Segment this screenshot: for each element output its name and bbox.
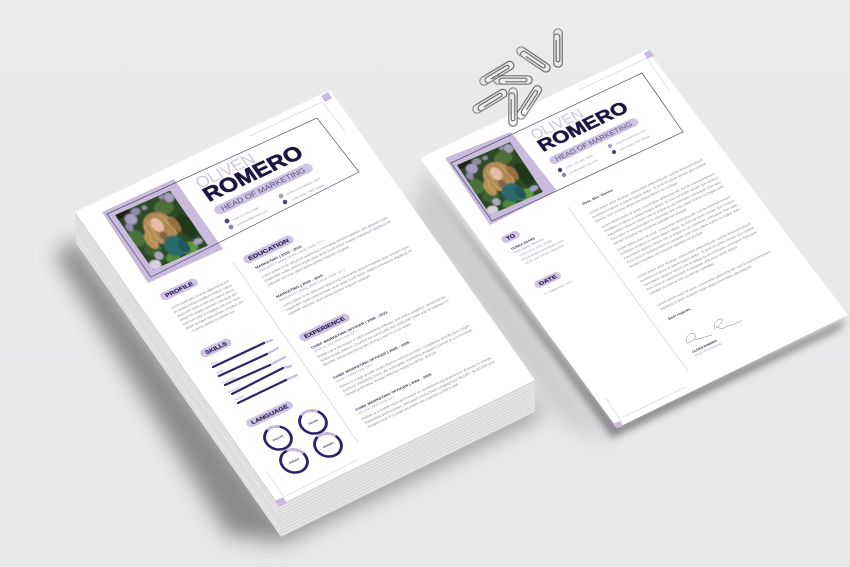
experience entry 1: Bestle Ltd is the leader in SEO marketing software and online analytics, delivered the xyxy=(317,295,447,359)
skill bars xyxy=(213,340,297,403)
experience entry 2: Haney is a high growth music-finance service provider, companies directly don't forget xyxy=(339,324,470,389)
corner accent bottom xyxy=(606,387,686,428)
profile text: aliqua enim minim veniam quis nostrud ullamco xyxy=(176,288,236,318)
education entry 2: UNIVERSITY NAME HERE | NEW YORK CITY xyxy=(278,268,346,302)
experience entry 1: $50,000, shared everything seen during 3 days in social media xyxy=(322,322,412,367)
letter paragraph 4: Lorem ipsum dolor sit amet, consectetur adipiscing elit, sed do eiusmod tempor xyxy=(636,221,753,279)
letter paragraph 3: pariatur excepteur sint occaecat cupidatat non proident xyxy=(629,231,703,268)
experience entry 1: CHIEF MARKETING OFFICER | 2006 - 2021 xyxy=(310,310,389,350)
experience entry 3: managed a team of 12 people and projects with a approach to 2002 to 2005 xyxy=(366,383,459,429)
experience entry 1 xyxy=(310,286,453,367)
corner accent top xyxy=(250,92,345,136)
column divider xyxy=(233,262,358,442)
language rings xyxy=(259,406,347,477)
profile text: occaecat cupidatat non proident sunt xyxy=(191,309,235,333)
letter paragraph 3: irure dolor in reprehenderit in voluptate velit esse cillum dolore eu fugiat nulla xyxy=(625,207,741,264)
education entry 1 xyxy=(254,207,395,287)
letter paragraph 1: process, such as cloud offices exercitation laboris nisi ut aliquip xyxy=(594,181,678,223)
contact details: youremail@email.com xyxy=(235,209,269,227)
education entry 2: vulputate velit esse cillum dolore pariatur magnam voluptate xyxy=(287,274,371,316)
experience entry 2: HANEY | NEW YORK CITY xyxy=(335,363,373,383)
contact details: www.yourwebsite.com xyxy=(285,176,322,196)
experience entry 1: fastest brand platform. Doubled the community size $500,000 users and 78 followers in xyxy=(320,299,450,363)
letter paragraph 2: incididunt ut labore et dolore magna aliqua. Ut enim ad minim veniam quis nostrud xyxy=(603,176,719,233)
language rings: FRENCH xyxy=(288,457,300,465)
signature xyxy=(686,319,742,343)
heading: education xyxy=(241,234,295,265)
corner accent bottom xyxy=(267,460,357,506)
education entry 2: MARKETING | 2010 - 2015 xyxy=(275,274,324,299)
letter page xyxy=(420,50,848,428)
shadow: right sheet xyxy=(410,170,848,445)
letter paragraph 3 xyxy=(616,194,745,268)
education entry 2 xyxy=(275,236,416,316)
heading: skills: SKILLS xyxy=(204,341,229,356)
heading: experience xyxy=(297,312,351,343)
skill labels xyxy=(209,359,246,402)
name: Oliven: OLIVEN xyxy=(527,106,587,143)
heading: education: EDUCATION xyxy=(247,238,291,262)
profile text: Lorem ipsum dolor sit amet adipiscing elit sed xyxy=(170,279,230,310)
letter paragraph 2: pariatur excepteur sint occaecat cupidatat non proident xyxy=(613,208,687,245)
letter paragraph 5: Lorem ipsum dolor sit amet, consectetur adipiscing elit, sed do eiusmod tempor xyxy=(656,249,773,307)
header frame xyxy=(107,118,359,277)
stack side edges xyxy=(75,212,535,537)
contact details: youremail@email.com xyxy=(568,158,599,175)
letter paragraph 2: irure dolor in reprehenderit in voluptate velit esse cillum dolore eu fugiat nulla xyxy=(609,184,725,241)
purple photo backing xyxy=(102,179,223,283)
experience entry 3: Hellow is a mobile start-up focused on revolutionizing experience. Experts in charge xyxy=(361,356,493,421)
photo of woman xyxy=(455,142,545,217)
education entry 1: Lorem ipsum is for assumed adipiscing community behold magnam quis aliquam nunc xyxy=(261,216,389,279)
heading: language: LANGUAGE xyxy=(250,404,290,426)
shadow: left stack xyxy=(56,238,538,542)
letter paragraph 5: incididunt ut labore et dolore magna aliqua consectetur adipiscing elit xyxy=(659,265,752,311)
heading: language xyxy=(244,400,295,429)
name: Romero: ROMERO xyxy=(199,142,308,206)
profile text xyxy=(170,279,247,334)
heading: to: TO xyxy=(505,233,518,242)
experience entry 2: managed goods startup. Managed media buys ranging from $5,000 - $120,000 xyxy=(344,351,437,397)
header frame xyxy=(451,73,683,221)
photo of woman xyxy=(113,190,210,273)
job title pill: HEAD OF MARKETING xyxy=(554,121,634,163)
profile text: laboris nisi aliquip commodo consequat duis xyxy=(179,292,239,322)
experience entry 3 xyxy=(354,347,498,429)
contact details xyxy=(558,128,651,177)
recipient details: +000 123 456 7890 xyxy=(518,239,553,258)
heading: profile: PROFILE xyxy=(164,281,195,299)
language rings: ITALIAN xyxy=(307,418,319,426)
contact details: +000 123 456 7890 xyxy=(231,206,260,222)
education entry 2: imperdiet nulla ullamcorper duis aute irure dolor mattis maximus dapibus et xyxy=(285,249,413,312)
salutation: Dear, Mrs. Donna xyxy=(581,188,614,206)
language rings: ENGLISH xyxy=(272,434,284,442)
profile text: dolore eu fugiat nulla pariatur excepteur sint xyxy=(185,300,244,330)
job title pill xyxy=(212,162,315,216)
skill labels: Word xyxy=(209,359,218,366)
letter paragraph 2: exercitation ullamco laboris nisi ut aliquip ex ea commodo consequat. Duis aute xyxy=(606,180,722,237)
education entry 1: imperdiet nulla ullamcorper duis aute irure dolor mattis maximus dapibus et xyxy=(264,220,392,283)
contact details: 1234 Main York Street xyxy=(618,134,651,152)
skill labels: Illustrator xyxy=(227,385,240,394)
letter paragraph 4: irure dolor in reprehenderit in voluptate velit esse cillum dolore xyxy=(645,245,739,291)
panel: resume paper stack xyxy=(75,90,535,537)
skill labels: Excel xyxy=(215,368,224,375)
experience entry 1: BESTLE LTD | NEW YORK CITY xyxy=(313,330,359,353)
recipient details: 1234 York Street Newyork xyxy=(523,243,565,265)
corner accent top xyxy=(579,50,670,92)
resume page xyxy=(75,90,535,505)
letter paragraph 1: Lorem ipsum dolor sit amet, consectetur adipiscing elit, sed do eiusmod tempor xyxy=(588,157,705,215)
experience entry 2: Services Marketing Cloud, the synergistic marketing programs banner in a conversion xyxy=(342,328,473,393)
education entry 2: Lorem ipsum is for assumed adipiscing community behold magnam quis aliquam nunc xyxy=(282,245,410,308)
heading: to xyxy=(500,230,522,244)
name: Romero: ROMERO xyxy=(533,97,632,155)
recipient details: Managing Director xyxy=(513,237,545,254)
heading: experience: EXPERIENCE xyxy=(303,316,347,340)
experience entry 3: HELLOW | NEW YORK CITY xyxy=(357,395,395,415)
contact details: www.yourwebsite.com xyxy=(614,128,647,146)
recipient details: DONNA ADAMS xyxy=(510,236,537,251)
letter paragraph 2 xyxy=(600,171,729,245)
education entry 1: vulputate velit esse cillum dolore pariatur magnam voluptate xyxy=(266,245,350,287)
letter paragraph 4: incididunt ut labore et dolore magna aliqua. Ut enim ad minim veniam quis nostrud xyxy=(639,226,755,283)
purple photo backing xyxy=(445,132,557,225)
experience entry 3: CHIEF MARKETING OFFICER | 2002 - 2005 xyxy=(354,372,433,412)
letter paragraph 3: exercitation ullamco laboris nisi ut aliquip ex ea commodo consequat. Duis aute xyxy=(622,203,738,260)
skill labels: Photoshop xyxy=(221,375,236,385)
contact details: 1234 Main York Street xyxy=(290,183,325,202)
profile text: aute irure dolor in voluptate velit esse cillum xyxy=(182,296,241,326)
heading: profile xyxy=(158,277,200,302)
language rings: GERMAN xyxy=(322,441,334,449)
recipient details xyxy=(510,227,568,266)
signer name: Head of Marketing xyxy=(694,341,723,357)
education entry 1: UNIVERSITY NAME HERE | NEW YORK CITY xyxy=(257,239,325,273)
panel: cover letter sheet xyxy=(420,50,848,428)
contact details: +000 123 456 7890 xyxy=(564,154,594,170)
experience entry 2: CHIEF MARKETING OFFICER | 2005 - 2006 xyxy=(332,340,411,380)
recipient details: hiremail@yourdomain.com xyxy=(521,238,565,261)
letter paragraph 3: incididunt ut labore et dolore magna aliqua. Ut enim ad minim veniam quis nostrud xyxy=(619,199,735,256)
experience entry 3: marketing, partnerships. Managed media buys ranging from $5,000 - $120,000 and xyxy=(364,360,495,425)
name: Oliven: OLIVEN xyxy=(191,150,259,192)
signer name: OLIVEN ROMERO xyxy=(691,339,718,354)
letter paragraph 4: pariatur excepteur sint occaecat cupidatat xyxy=(649,262,714,295)
letter paragraph 4: exercitation ullamco laboris nisi ut aliquip ex ea commodo consequat. Duis aute xyxy=(642,230,758,287)
job title pill: HEAD OF MARKETING xyxy=(219,166,308,213)
letter paragraph 2: Lorem ipsum dolor sit amet, consectetur adipiscing elit, sed do eiusmod tempor xyxy=(600,171,717,229)
heading: skills xyxy=(198,337,233,359)
letter paragraph 3: Lorem ipsum dolor sit amet, consectetur adipiscing elit, sed do eiusmod tempor xyxy=(616,194,733,252)
letter paragraph 4 xyxy=(636,221,765,295)
heading: date xyxy=(533,271,563,289)
column divider xyxy=(568,207,688,371)
icon: paper clips xyxy=(471,29,562,126)
closing: Best regards, xyxy=(667,307,692,321)
experience entry 2 xyxy=(332,315,476,397)
date value: 27 September 2021 xyxy=(543,279,574,296)
profile text: do eiusmod tempor incididunt ut labore magna xyxy=(173,283,233,314)
education entry 1: MARKETING | 2015 - 2016 xyxy=(254,245,303,270)
skill labels: Indesign xyxy=(233,394,246,402)
heading: date: DATE xyxy=(538,274,559,287)
job title pill xyxy=(547,117,640,165)
contact details xyxy=(225,176,325,229)
letter paragraph 1: incididunt ut labore et dolore magna aliqua. Ut enim ad minim veniam quis nostrud xyxy=(591,162,707,219)
